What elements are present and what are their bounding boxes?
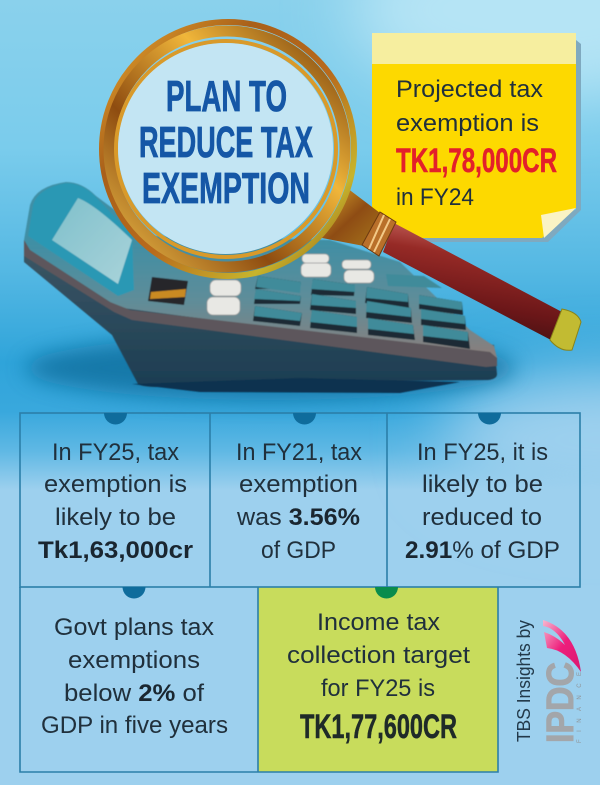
sticky note text: in FY24	[396, 184, 474, 211]
card markers	[104, 413, 501, 598]
calculator body	[24, 240, 497, 393]
calculator white keys	[207, 254, 374, 315]
card: FY25 tax exemption: In FY25, tax	[52, 439, 179, 466]
card: FY25 tax exemption: exemption is	[44, 471, 187, 498]
card: FY21 tax exemption	[236, 439, 362, 564]
lens ring	[102, 22, 354, 276]
title	[139, 72, 313, 213]
card: five year plan	[41, 614, 228, 739]
handle end cap	[550, 309, 581, 350]
green highlighted card background	[258, 587, 498, 772]
card: income tax target: Income tax	[317, 609, 440, 636]
title: PLAN TO	[166, 72, 287, 121]
card: five year plan: below 2% of	[64, 680, 204, 707]
sticky note fold	[541, 208, 576, 238]
card: income tax target: collection target	[287, 642, 470, 669]
title: REDUCE TAX	[139, 118, 313, 167]
calculator display housing	[28, 183, 134, 296]
card: income tax target: for FY25 is	[321, 675, 435, 702]
card: FY25 tax exemption	[38, 439, 193, 564]
grid lines	[20, 413, 580, 772]
credit	[514, 620, 583, 743]
logo: IPDC Finance: FINANCE	[577, 672, 583, 743]
card: FY25 share of GDP: reduced to	[422, 504, 542, 531]
sticky note text: exemption is	[396, 110, 539, 137]
card: FY25 share of GDP: In FY25, it is	[417, 439, 548, 466]
sticky note	[372, 33, 581, 242]
card: FY21 tax exemption: exemption	[239, 471, 358, 498]
collar	[362, 212, 396, 256]
card: five year plan: exemptions	[68, 647, 200, 674]
neck	[322, 188, 384, 246]
sticky note shadow	[372, 40, 581, 242]
card: FY25 tax exemption: likely to be	[55, 504, 176, 531]
sticky note tape band	[372, 33, 576, 64]
handle	[383, 223, 562, 340]
card: five year plan: GDP in five years	[41, 712, 228, 739]
sticky note paper	[372, 64, 576, 238]
card: income tax target	[287, 609, 470, 746]
title: EXEMPTION	[142, 164, 310, 213]
card: FY21 tax exemption: In FY21, tax	[236, 439, 362, 466]
card: five year plan: Govt plans tax	[54, 614, 214, 641]
illustration: calculator	[24, 182, 497, 393]
calculator deck	[24, 182, 497, 358]
card: FY21 tax exemption: of GDP	[261, 537, 336, 564]
credit text: TBS Insights by	[514, 620, 534, 742]
sticky note text: Projected tax	[396, 76, 543, 103]
card: FY25 share of GDP: likely to be	[422, 471, 543, 498]
card: FY25 share of GDP	[405, 439, 560, 564]
calculator number keys	[253, 274, 470, 349]
calculator display	[52, 198, 132, 284]
card: FY21 tax exemption: was 3.56%	[236, 504, 360, 531]
card: FY25 tax exemption: Tk1,63,000cr	[38, 537, 193, 564]
card: income tax target: TK1,77,600CR	[300, 708, 457, 746]
logo: IPDC Finance: IPDC	[540, 662, 582, 743]
calculator solar panel	[148, 277, 188, 305]
calculator trim	[24, 240, 497, 367]
lens glass	[118, 43, 333, 254]
card: FY25 share of GDP: 2.91% of GDP	[405, 537, 560, 564]
calculator shadow	[25, 336, 515, 400]
magnifying glass	[102, 22, 581, 350]
sticky note text	[396, 76, 557, 211]
